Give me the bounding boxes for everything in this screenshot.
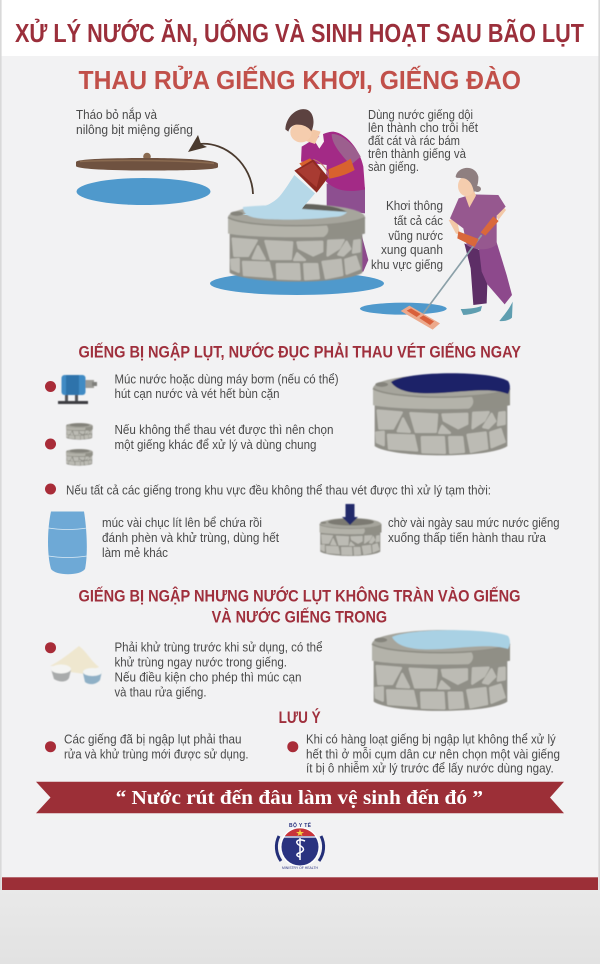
pool under main well xyxy=(210,272,384,295)
heading: note: LƯU Ý xyxy=(279,708,321,727)
text: pump water out: Múc nước hoặc dùng máy bơm (nếu có thể) xyxy=(114,372,338,386)
text: rinse the well wall: Dùng nước giếng dội xyxy=(368,108,473,122)
text: note right: Khi có hàng loạt giếng bị ngập lụt không thể xử lý xyxy=(306,733,556,747)
text: note left: rửa và khử trùng mới được sử dụng. xyxy=(64,748,248,762)
illustration: main well xyxy=(228,204,365,282)
arrow: lid removed xyxy=(188,135,253,194)
text: remove the lid: Tháo bỏ nắp và xyxy=(76,107,157,122)
header band xyxy=(0,0,600,56)
bullet xyxy=(45,484,56,494)
text: rinse the well wall xyxy=(368,108,478,174)
text: note right: ít bị ô nhiễm xử lý trước để lấy nước dùng ngay. xyxy=(306,761,554,776)
text: wait for water level xyxy=(388,516,560,545)
text: rinse the well wall: lên thành cho trôi hết xyxy=(368,121,478,135)
heading: flooded turbid well: GIẾNG BỊ NGẬP LỤT, NƯỚC ĐỤC PHẢI THAU VÉT GIẾNG NGAY xyxy=(78,342,522,362)
icon: well with downward arrow xyxy=(320,504,381,556)
icon: disinfectant powder xyxy=(50,646,102,684)
bullet xyxy=(45,741,56,752)
text: remove the lid: nilông bịt miệng giếng xyxy=(76,123,193,137)
bullet xyxy=(45,642,56,653)
icon: two small wells xyxy=(66,423,93,466)
illustration: water stream and bucket xyxy=(243,159,328,215)
heading: well cleaning: THAU RỬA GIẾNG KHƠI, GIẾNG ĐÀO xyxy=(78,64,521,95)
text: remove the lid xyxy=(76,107,193,137)
text: pump into tank xyxy=(102,516,279,560)
text: disinfect before use: khử trùng ngay nước trong giếng. xyxy=(114,656,287,670)
heading: flooded clear well: GIẾNG BỊ NGẬP NHƯNG NƯỚC LỤT KHÔNG TRÀN VÀO GIẾNG xyxy=(78,587,520,606)
text: note left: Các giếng đã bị ngập lụt phải thau xyxy=(64,733,242,747)
slogan: “ Nước rút đến đâu làm vệ sinh đến đó ” xyxy=(116,787,483,809)
text: pump water out: hút cạn nước và vét hết bùn cặn xyxy=(114,387,280,401)
heading: flooded clear well: VÀ NƯỚC GIẾNG TRONG xyxy=(212,608,387,627)
text: pump into tank: đánh phèn và khử trùng, dùng hết xyxy=(102,531,279,545)
text: clear the puddles: vũng nước xyxy=(388,229,443,243)
text: note left xyxy=(64,733,248,762)
text: pump into tank: làm mẻ khác xyxy=(102,546,168,560)
text: choose another well: Nếu không thể thau vét được thì nên chọn xyxy=(114,423,334,437)
text: note right xyxy=(306,733,560,776)
text: choose another well xyxy=(114,423,334,452)
bullet xyxy=(287,741,298,752)
text: disinfect before use: Phải khử trùng trước khi sử dụng, có thể xyxy=(114,641,323,655)
illustration: flooded well with dark water xyxy=(373,373,510,455)
text: clear the puddles: xung quanh xyxy=(381,243,443,257)
text: clear the puddles: khu vực giếng xyxy=(371,258,443,272)
illustration: well lid and puddle xyxy=(76,153,218,205)
text: disinfect before use: và thau rửa giếng. xyxy=(114,685,206,699)
ribbon banner xyxy=(36,782,564,813)
text: rinse the well wall: trên thành giếng và xyxy=(368,147,466,161)
logo: ministry of health: BỘ Y TẾ xyxy=(289,821,312,829)
text: clear the puddles xyxy=(371,199,443,272)
text: wait for water level: xuống thấp tiến hành thau rửa xyxy=(388,531,546,545)
icon: water pump xyxy=(58,375,97,404)
text: pump water out xyxy=(114,372,338,401)
text: wait for water level: chờ vài ngày sau mức nước giếng xyxy=(388,516,560,530)
text: disinfect before use xyxy=(114,641,323,699)
illustration: man pouring water xyxy=(285,109,368,272)
icon: water barrel xyxy=(48,512,87,574)
text: temporary treatment: Nếu tất cả các giếng trong khu vực đều không thể thau vét được thì xử lý tạm thời: xyxy=(66,483,491,497)
bullet xyxy=(45,438,56,450)
bullet xyxy=(45,381,56,392)
illustration: woman mopping xyxy=(360,168,513,330)
text: clear the puddles: tất cả các xyxy=(394,214,443,228)
text: disinfect before use: Nếu điều kiện cho phép thì múc cạn xyxy=(114,671,302,685)
logo: ministry of health: MINISTRY OF HEALTH xyxy=(282,866,318,870)
text: choose another well: một giếng khác để xử lý và dùng chung xyxy=(114,438,317,452)
heading: flooded clear well xyxy=(78,587,520,627)
text: clear the puddles: Khơi thông xyxy=(386,199,443,213)
text: rinse the well wall: đất cát và rác bám xyxy=(368,134,460,148)
text: note right: hết thì ở mỗi cụm dân cư nên chọn một vài giếng xyxy=(306,747,560,762)
text: rinse the well wall: sàn giếng. xyxy=(368,160,419,174)
footer bar xyxy=(2,877,598,890)
bottom grey area xyxy=(0,890,600,964)
logo: ministry of health xyxy=(276,821,324,870)
text: pump into tank: múc vài chục lít lên bể chứa rồi xyxy=(102,516,262,530)
illustration: well with clear water xyxy=(372,630,510,711)
